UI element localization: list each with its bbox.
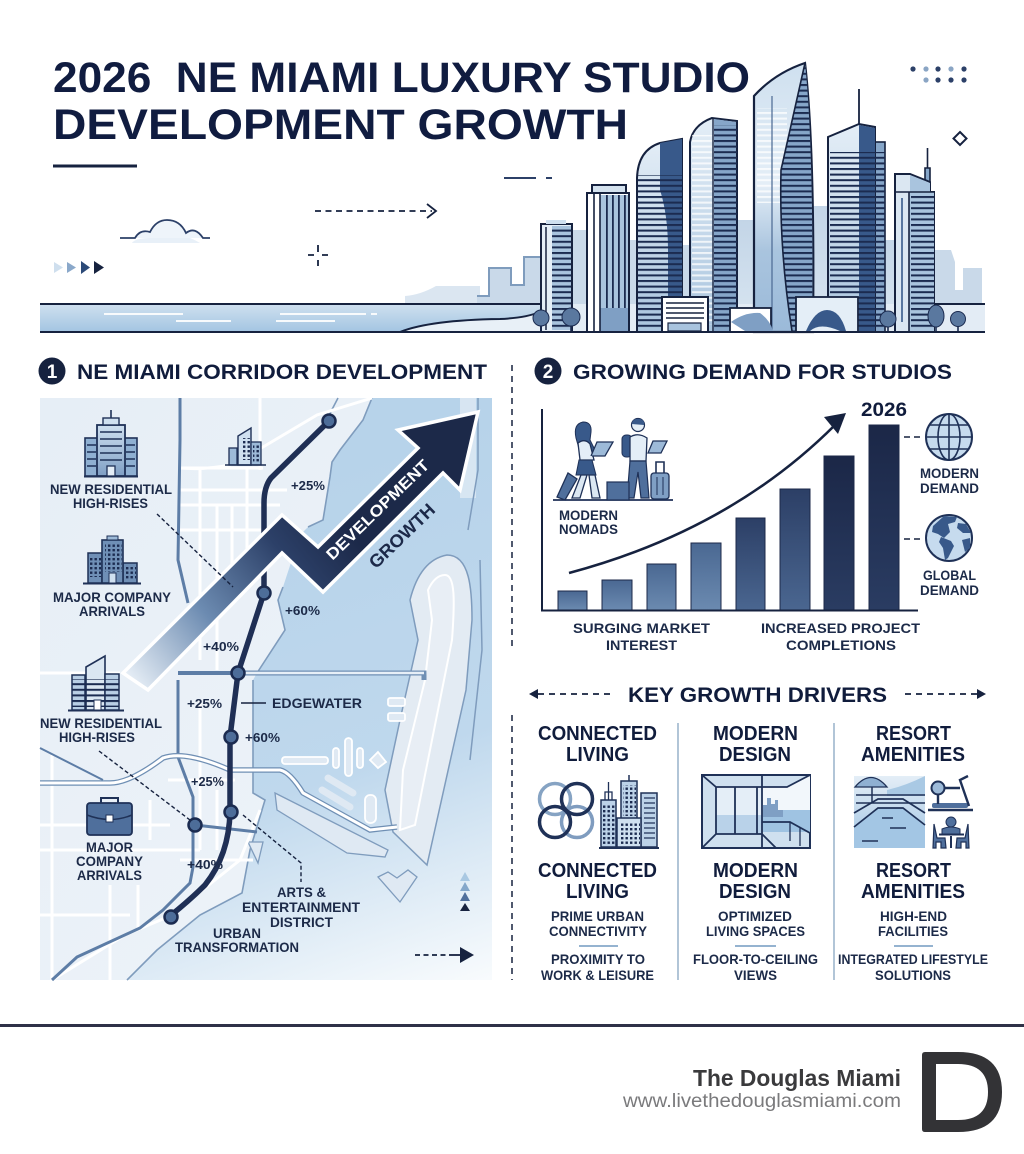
- development growth arrow: DEVELOPMENT: [324, 457, 433, 564]
- map labels: URBAN: [213, 925, 261, 941]
- axis captions: INCREASED PROJECT: [761, 620, 920, 636]
- panel: modern design: FLOOR-TO-CEILING: [693, 951, 818, 967]
- diamond icon: [954, 132, 966, 145]
- panel: resort amenities: INTEGRATED LIFESTYLE: [838, 951, 988, 967]
- nomads label: [559, 507, 618, 537]
- tower 5: [754, 63, 813, 332]
- icon: company buildings: [83, 536, 141, 584]
- bar chart: [542, 400, 920, 653]
- icon: pool: [854, 776, 925, 848]
- global demand label: [920, 567, 979, 598]
- bars: [558, 425, 899, 610]
- icon: cloud: [120, 220, 210, 243]
- modern demand label: DEMAND: [920, 480, 979, 496]
- panel: connected living: PRIME URBAN: [551, 908, 644, 924]
- map islands: [248, 698, 417, 902]
- icon: treadmill: [928, 776, 973, 810]
- background buildings: [405, 206, 982, 305]
- panel: connected living: LIVING: [566, 744, 629, 766]
- tower 1: [541, 220, 572, 332]
- footer brand text: [622, 1065, 901, 1112]
- map labels: ARTS &: [277, 884, 326, 900]
- water: [40, 304, 985, 332]
- growth percentages: [187, 478, 325, 872]
- map labels: [40, 481, 362, 955]
- panel: modern design: [693, 723, 818, 983]
- key growth drivers heading: KEY GROWTH DRIVERS: [628, 684, 887, 707]
- key growth drivers heading: [529, 684, 986, 707]
- section 1 heading: NE MIAMI CORRIDOR DEVELOPMENT: [77, 361, 487, 384]
- section 2 heading: 2: [543, 362, 553, 383]
- map labels: EDGEWATER: [272, 695, 362, 711]
- icon: earth globe: [926, 515, 972, 561]
- panel: resort amenities: SOLUTIONS: [875, 967, 951, 983]
- nomads label: NOMADS: [559, 521, 618, 537]
- tower 7: [895, 148, 934, 332]
- panel: connected living: CONNECTED: [538, 860, 657, 882]
- icon: window room: [702, 775, 810, 848]
- panel: modern design: OPTIMIZED: [718, 908, 792, 924]
- tower 4: [690, 118, 737, 332]
- panel: modern design: LIVING SPACES: [706, 923, 805, 939]
- title: DEVELOPMENT GROWTH: [53, 101, 628, 149]
- growth percentages: +60%: [245, 730, 280, 745]
- panel: modern design: DESIGN: [719, 881, 791, 903]
- growth percentages: +40%: [203, 639, 239, 654]
- vertical dashed divider: [511, 365, 513, 980]
- panel: resort amenities: [838, 723, 988, 983]
- title underline: [53, 164, 137, 168]
- woman: [557, 422, 613, 500]
- barrier land: [385, 398, 482, 865]
- map labels: ARRIVALS: [77, 867, 142, 883]
- map labels: MAJOR: [86, 839, 133, 855]
- panel: connected living: LIVING: [566, 881, 629, 903]
- section 2 heading: GROWING DEMAND FOR STUDIOS: [573, 361, 952, 384]
- panel: resort amenities: RESORT: [876, 860, 951, 882]
- map labels: HIGH-RISES: [73, 495, 148, 511]
- icon: modern nomads: [553, 418, 673, 500]
- man: [607, 418, 669, 500]
- map labels: COMPANY: [76, 853, 144, 869]
- title: 2026 NE MIAMI LUXURY STUDIO: [53, 54, 750, 102]
- transit stations: [164, 414, 336, 924]
- map labels: ENTERTAINMENT: [242, 899, 360, 915]
- transit line: [170, 421, 329, 916]
- secondary transit lines: [40, 398, 257, 980]
- icon: linked rings: [540, 784, 592, 838]
- small dash marks: [504, 177, 552, 179]
- growth percentages: +25%: [187, 696, 222, 711]
- title: [53, 54, 750, 149]
- map labels: NEW RESIDENTIAL: [50, 481, 172, 497]
- panel: modern design: DESIGN: [719, 744, 791, 766]
- global demand label: DEMAND: [920, 582, 979, 598]
- arrow triangles: [54, 261, 104, 274]
- 2026 label: 2026: [861, 400, 907, 421]
- map water: [127, 398, 492, 980]
- tower 6: [828, 89, 885, 332]
- podium buildings: [662, 297, 858, 332]
- growth percentages: +60%: [285, 603, 320, 618]
- axis captions: INTEREST: [606, 637, 677, 653]
- panel: connected living: PROXIMITY TO: [551, 951, 645, 967]
- map roads: [40, 398, 372, 980]
- panel: connected living: WORK & LEISURE: [541, 967, 654, 983]
- footer rule: [0, 1024, 1024, 1027]
- map dashed arrow: [415, 947, 474, 963]
- waterfront lines: [40, 304, 985, 332]
- modern demand label: [920, 465, 979, 496]
- skyline illustration: [40, 63, 985, 332]
- demand connectors: [904, 437, 920, 539]
- map labels: MAJOR COMPANY: [53, 589, 172, 605]
- global demand label: GLOBAL: [923, 567, 976, 583]
- panel: connected living: CONNECTIVITY: [549, 923, 648, 939]
- decorative dots: [910, 66, 967, 83]
- column dividers: [678, 723, 834, 980]
- tower 2: [587, 185, 629, 332]
- panel: resort amenities: FACILITIES: [878, 923, 948, 939]
- growth percentages: +40%: [187, 857, 223, 872]
- map tick line: [241, 702, 266, 704]
- axis captions: SURGING MARKET: [573, 620, 710, 636]
- icon: high-rise: [84, 410, 138, 476]
- nomads label: MODERN: [559, 507, 618, 523]
- development growth arrow: [123, 412, 478, 690]
- map labels: HIGH-RISES: [59, 729, 135, 745]
- panel: resort amenities: RESORT: [876, 723, 951, 745]
- growth percentages: +25%: [291, 478, 325, 493]
- growth percentages: +25%: [191, 774, 224, 789]
- panel: connected living: CONNECTED: [538, 723, 657, 745]
- trend arrow: [569, 413, 846, 573]
- logo D: [922, 1052, 1002, 1132]
- map labels: ARRIVALS: [79, 603, 145, 619]
- legend triangles: [460, 872, 470, 911]
- icon: lounge table: [933, 817, 969, 848]
- panel: resort amenities: AMENITIES: [861, 881, 965, 903]
- axes: [542, 409, 918, 610]
- panel: modern design: MODERN: [713, 860, 798, 882]
- footer brand text: www.livethedouglasmiami.com: [622, 1091, 901, 1112]
- crosshair: [308, 245, 328, 266]
- panel: resort amenities: HIGH-END: [880, 908, 947, 924]
- map land: [40, 398, 492, 980]
- panel: resort amenities: AMENITIES: [861, 744, 965, 766]
- dashed arrow: [315, 204, 436, 218]
- panel: connected living: [538, 723, 659, 983]
- callout dashed leaders: [99, 514, 301, 882]
- modern demand label: MODERN: [920, 465, 979, 481]
- map labels: TRANSFORMATION: [175, 939, 299, 955]
- icon: small building: [225, 428, 266, 465]
- icon: residential cluster: [68, 656, 124, 710]
- map labels: NEW RESIDENTIAL: [40, 715, 162, 731]
- icon: briefcase: [87, 798, 132, 835]
- icon: wireframe globe: [926, 414, 972, 460]
- axis captions: [573, 620, 920, 653]
- map upper coastline: [257, 398, 372, 673]
- development growth arrow: GROWTH: [365, 500, 439, 572]
- section 1 heading: 1: [47, 362, 58, 383]
- trees: [533, 305, 966, 332]
- tower 3: [637, 139, 682, 332]
- footer brand text: The Douglas Miami: [693, 1065, 901, 1091]
- panel: corridor map: [40, 398, 492, 980]
- map labels: DISTRICT: [270, 914, 333, 930]
- panel: modern design: VIEWS: [734, 967, 777, 983]
- axis captions: COMPLETIONS: [786, 637, 896, 653]
- panel: modern design: MODERN: [713, 723, 798, 745]
- icon: city: [599, 775, 659, 848]
- causeways: [40, 673, 424, 830]
